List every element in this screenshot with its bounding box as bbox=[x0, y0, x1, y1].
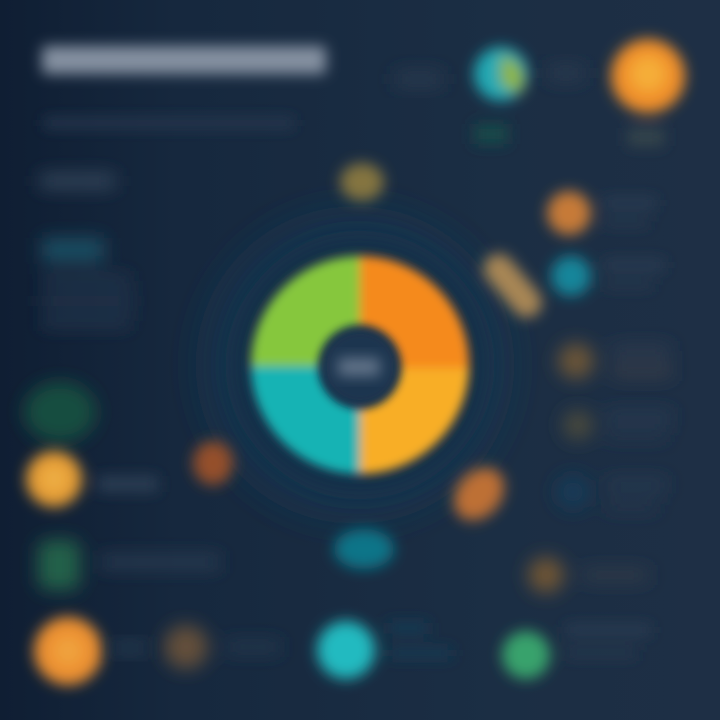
legend item 4 bbox=[563, 410, 672, 440]
teal icon bbox=[317, 621, 452, 679]
bottom row bbox=[112, 621, 650, 679]
icon: orange circle bbox=[611, 39, 685, 146]
node: bottom bbox=[334, 529, 394, 569]
donut segments bbox=[251, 256, 469, 474]
brown icon bbox=[164, 625, 280, 669]
top labels bbox=[396, 66, 584, 86]
node: upper right pill bbox=[477, 248, 548, 324]
donut centre bbox=[322, 329, 398, 405]
right legend bbox=[528, 191, 672, 593]
orange circle bbox=[34, 617, 102, 685]
legend item 6 bbox=[528, 557, 648, 593]
top right icons bbox=[396, 39, 685, 146]
left legend bbox=[24, 382, 220, 685]
green square bbox=[38, 540, 220, 590]
bottom label bbox=[112, 642, 148, 654]
donut chart bbox=[177, 187, 533, 543]
left panel text bbox=[40, 174, 134, 326]
outer dark ring bbox=[177, 187, 533, 543]
legend item 3 bbox=[558, 343, 672, 379]
node: left bbox=[193, 441, 233, 485]
legend item 1 bbox=[547, 191, 656, 235]
title bbox=[42, 46, 326, 128]
node: top bbox=[340, 163, 384, 201]
orbit nodes bbox=[193, 163, 548, 569]
legend item 2 bbox=[551, 256, 664, 296]
icon: multicolor circle bbox=[474, 47, 528, 144]
green circle bbox=[24, 382, 96, 442]
green icon bbox=[502, 625, 650, 679]
node: lower right bbox=[444, 458, 514, 530]
yellow circle bbox=[26, 451, 158, 507]
legend item 5 bbox=[556, 475, 666, 510]
